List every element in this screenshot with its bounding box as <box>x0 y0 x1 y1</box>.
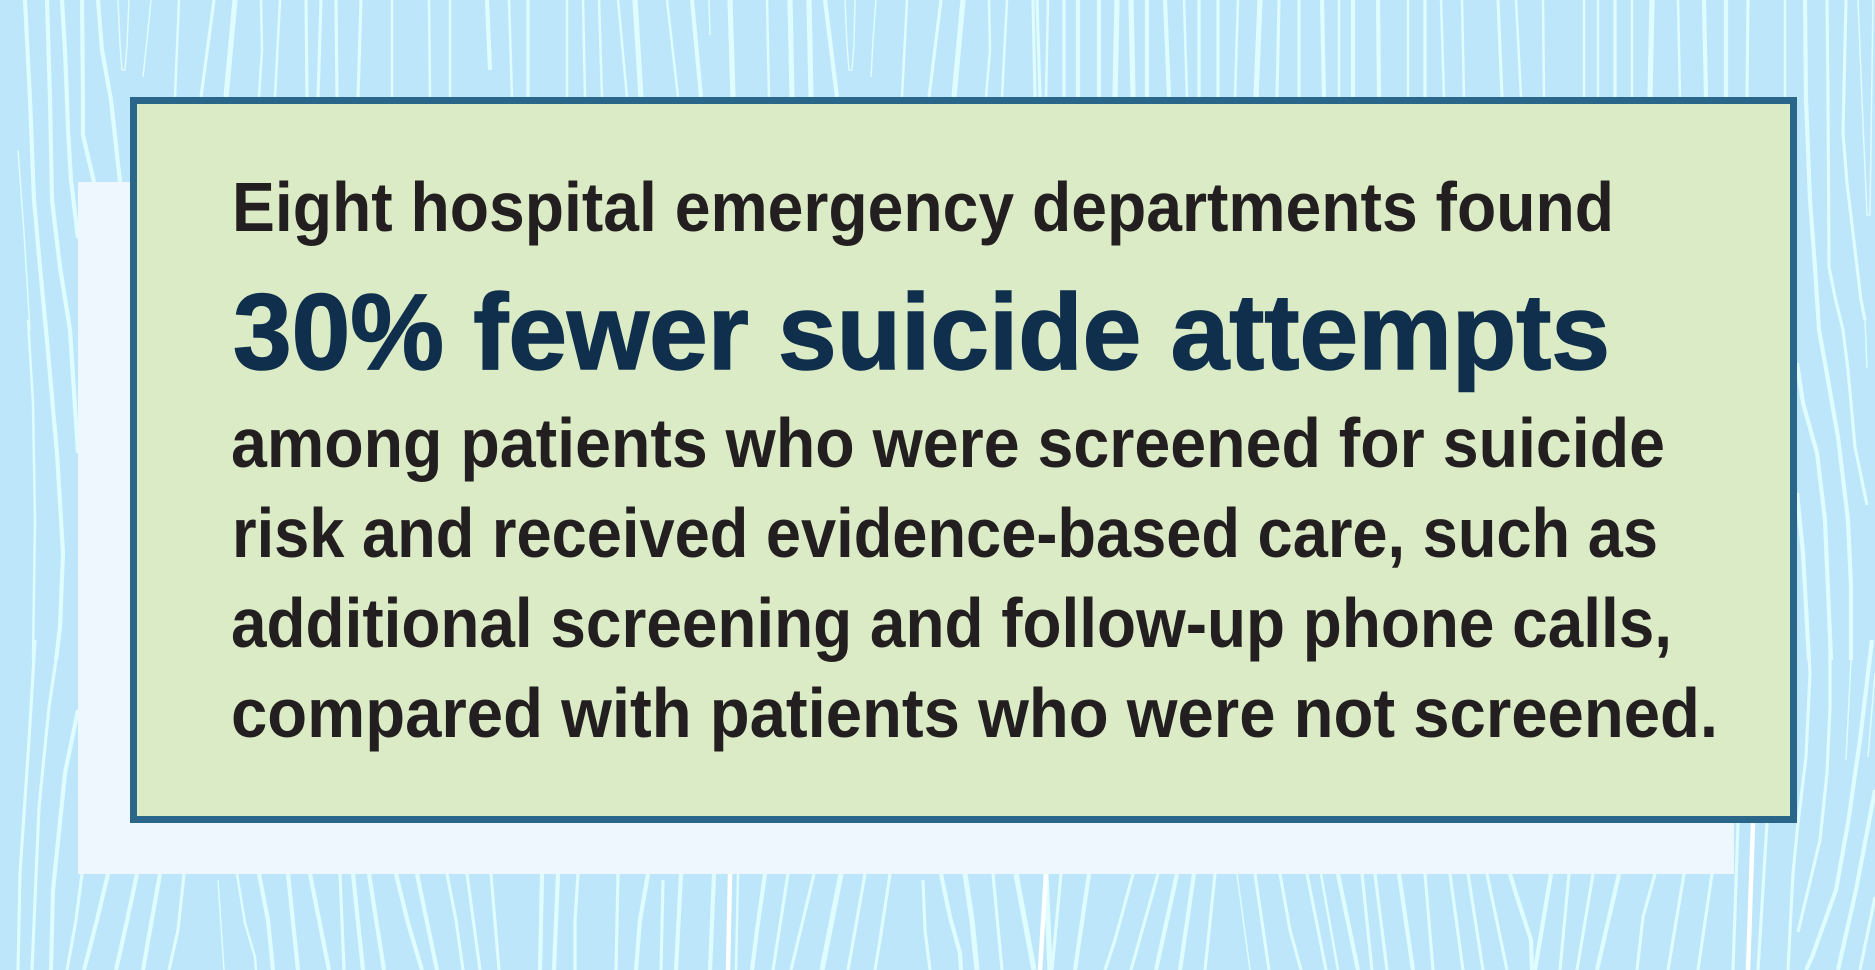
intro line: Eight hospital emergency departments found <box>232 168 1614 246</box>
body line 4: compared with patients who were not screened. <box>231 674 1718 752</box>
green card with blue border <box>134 100 1794 820</box>
headline statistic: 30% fewer suicide attempts <box>233 271 1610 392</box>
pale offset panel behind the card <box>78 182 1734 874</box>
body line 2: risk and received evidence-based care, such as <box>232 494 1658 572</box>
body line 3: additional screening and follow-up phone calls, <box>231 584 1672 662</box>
body line 1: among patients who were screened for suicide <box>231 404 1665 482</box>
text block <box>231 168 1718 752</box>
